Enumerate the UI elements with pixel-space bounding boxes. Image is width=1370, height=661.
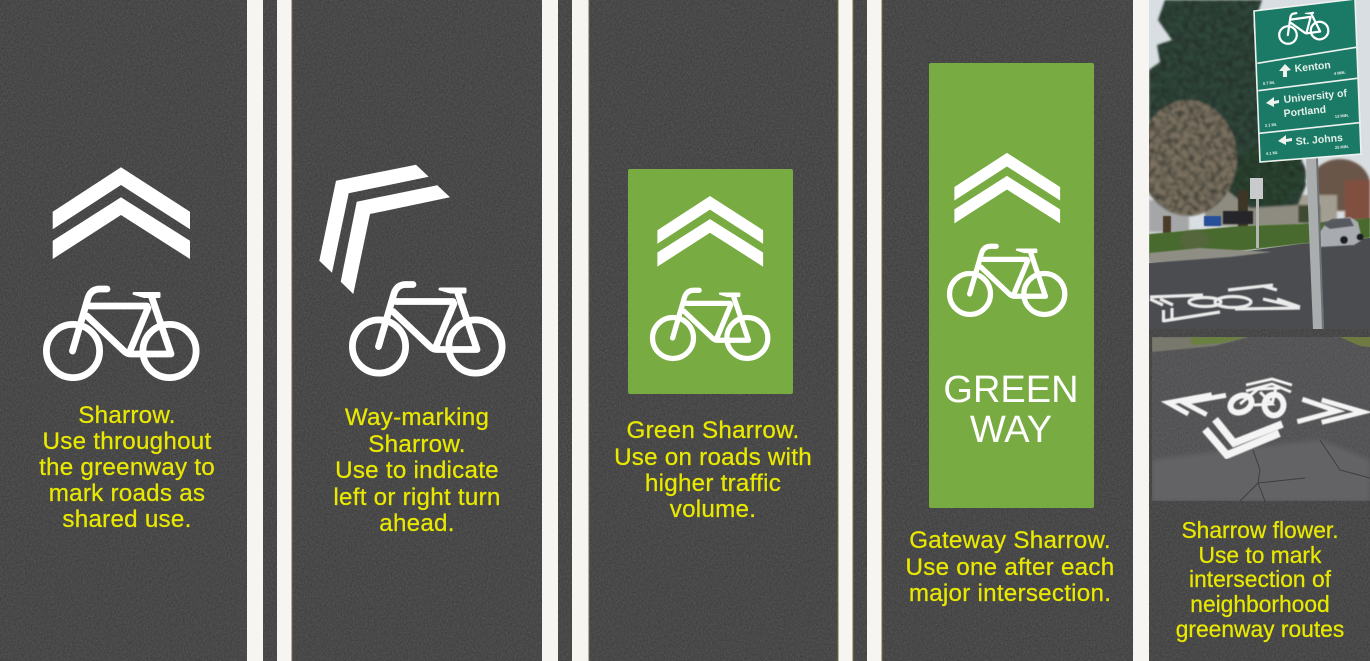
icon: double chevron <box>53 167 190 259</box>
icon: bicycle <box>653 290 768 358</box>
icon: bicycle <box>46 289 196 378</box>
caption: sharrow: Sharrow. <box>78 402 176 429</box>
caption: sharrow: shared use. <box>62 506 192 533</box>
top chevrons <box>1246 379 1292 392</box>
street sign: 0.7 MI. <box>1263 80 1275 86</box>
caption: way-marking sharrow: Sharrow. <box>368 431 466 458</box>
panel: way-marking sharrow <box>319 165 502 537</box>
caption: sharrow: mark roads as <box>49 480 205 507</box>
painted bicycle <box>1228 388 1284 416</box>
panel: green sharrow <box>614 169 812 523</box>
icon: double chevron <box>954 153 1060 223</box>
caption: way-marking sharrow: ahead. <box>379 510 455 537</box>
panel: sharrow <box>39 167 215 533</box>
caption: way-marking sharrow: Use to indicate <box>335 457 499 484</box>
street sign: 2.1 MI. <box>1265 122 1277 128</box>
icon: bicycle <box>352 284 502 373</box>
caption: gateway sharrow: Use one after each <box>906 554 1114 581</box>
caption: green sharrow: Use on roads with <box>614 444 812 471</box>
caption: sharrow flower: neighborhood <box>1190 591 1330 617</box>
caption: sharrow: Use throughout <box>43 428 211 455</box>
icon: double chevron <box>657 196 763 267</box>
caption: green sharrow: higher traffic <box>645 470 781 497</box>
icon: angled chevrons <box>319 165 450 294</box>
green rectangle <box>929 63 1094 508</box>
street sign: 4.1 MI. <box>1266 150 1278 156</box>
bottom chevrons <box>1205 419 1282 455</box>
green way label: WAY <box>970 409 1052 451</box>
street sign: University of <box>1283 87 1348 106</box>
green rectangle <box>628 169 793 394</box>
panel: gateway sharrow <box>906 63 1114 607</box>
caption: sharrow flower: Sharrow flower. <box>1181 517 1339 543</box>
street sign <box>1254 0 1361 162</box>
caption: green sharrow: volume. <box>670 496 756 523</box>
street sign: Portland <box>1283 104 1327 120</box>
car <box>1320 217 1364 247</box>
street sign: St. Johns <box>1295 132 1343 148</box>
pole <box>1306 158 1324 329</box>
caption: sharrow flower: Use to mark <box>1199 542 1322 568</box>
caption: way-marking sharrow: Way-marking <box>345 404 489 431</box>
icon: bicycle <box>950 246 1065 314</box>
street sign: Kenton <box>1294 59 1331 75</box>
road marking <box>1150 285 1300 322</box>
caption: gateway sharrow: major intersection. <box>909 580 1111 607</box>
lane stripes <box>247 0 1149 661</box>
caption: gateway sharrow: Gateway Sharrow. <box>909 527 1111 554</box>
street sign: 13 MIN. <box>1335 113 1349 119</box>
street sign: 4 MIN. <box>1334 70 1346 76</box>
left chevrons <box>1168 395 1226 415</box>
caption: sharrow flower: greenway routes <box>1176 616 1344 642</box>
photo: street sign and intersection <box>1139 0 1370 329</box>
right chevrons <box>1297 399 1363 422</box>
background houses and trees <box>1139 0 1370 232</box>
caption: sharrow flower: intersection of <box>1189 566 1332 592</box>
panel: sharrow flower <box>1139 0 1370 642</box>
caption: green sharrow: Green Sharrow. <box>627 417 799 444</box>
caption: sharrow: the greenway to <box>39 454 215 481</box>
green way label: GREEN <box>943 369 1079 411</box>
caption: way-marking sharrow: left or right turn <box>333 484 501 511</box>
street sign: 25 MIN. <box>1335 144 1349 150</box>
photo: sharrow flower road marking <box>1152 337 1370 501</box>
